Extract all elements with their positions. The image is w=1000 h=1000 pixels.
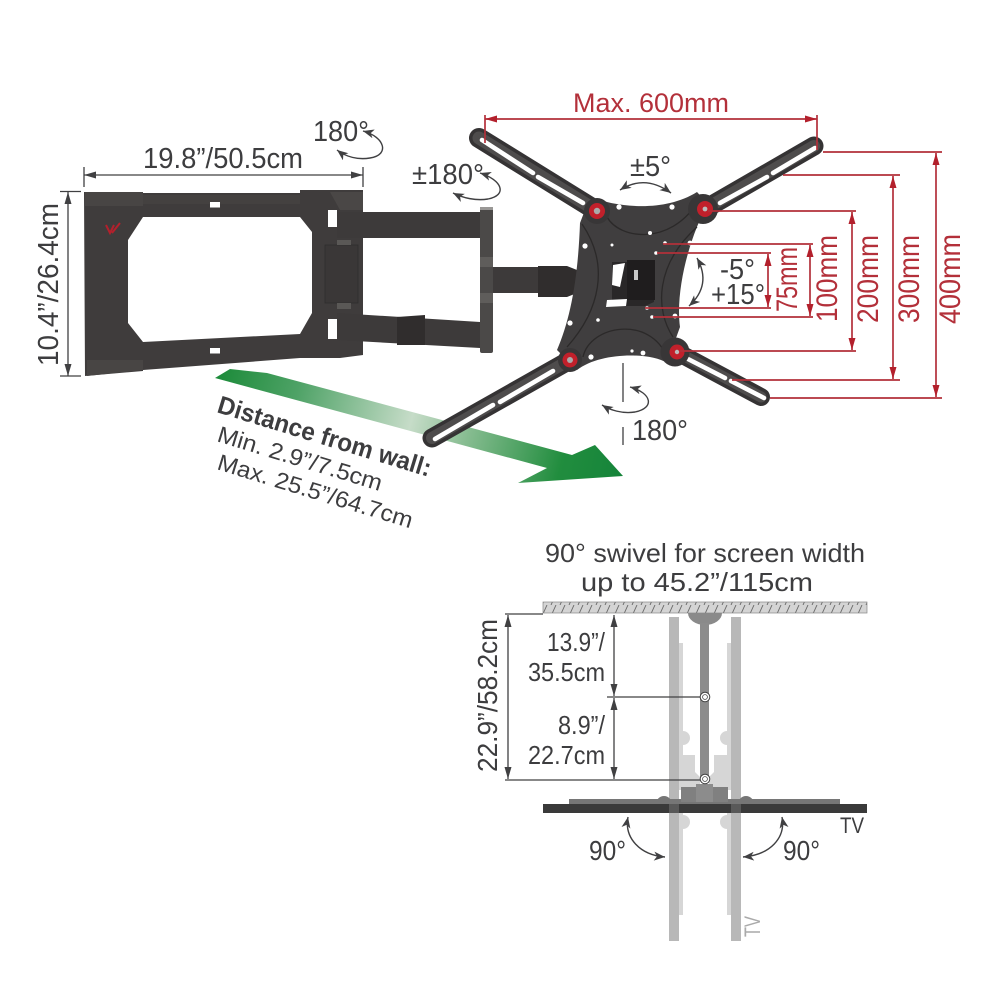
portrait rotation label 180 degrees: 180° <box>632 415 688 447</box>
dimension: first arm 13.9in: 35.5cm <box>528 657 605 687</box>
tilt label -5 +15 degrees <box>689 254 765 311</box>
dimension: second arm 8.9in: 8.9”/ <box>558 710 606 740</box>
bracket arms with slots <box>432 138 815 439</box>
dimension: first arm 13.9in <box>528 615 700 697</box>
dimension: 100mm: 100mm <box>811 235 844 322</box>
VESA plate <box>557 192 708 370</box>
TV labels: TV <box>840 813 864 838</box>
dimension: plate height 10.4in <box>33 192 81 376</box>
dimension: 300mm: 300mm <box>893 235 926 323</box>
tilt label -5 +15 degrees: +15° <box>711 279 765 311</box>
tilt rotation label 5 degrees <box>620 151 671 193</box>
TV landscape position <box>543 796 867 813</box>
dimension: 400mm: 400mm <box>934 234 967 324</box>
mounting holes <box>567 204 692 360</box>
TV swivelled positions <box>669 617 741 941</box>
mount arms <box>681 613 728 802</box>
distance from wall text: Distance from wall: <box>214 391 435 483</box>
rotation label: wall 180 degrees: 180° <box>313 116 369 148</box>
distance from wall text: Max. 25.5”/64.7cm <box>215 449 416 533</box>
swivel angle right 90 degrees <box>743 817 820 866</box>
distance from wall text <box>214 391 435 533</box>
dimension: 75mm: 75mm <box>771 247 804 312</box>
dimension: 75mm <box>645 247 804 312</box>
TV swivel side profiles <box>679 643 731 915</box>
tilt label -5 +15 degrees: -5° <box>720 254 755 286</box>
rotation label: wall 180 degrees <box>313 116 383 159</box>
dimension: total depth 22.9in: 22.9”/58.2cm <box>472 619 503 772</box>
brand logo <box>106 223 120 233</box>
rotation label: arm 180 degrees: ±180° <box>412 159 484 191</box>
tilt rotation label 5 degrees: ±5° <box>630 151 671 183</box>
swivel angle left 90 degrees <box>589 817 665 866</box>
swivel angle left 90 degrees: 90° <box>589 835 626 866</box>
dimension: plate height 10.4in: 10.4”/26.4cm <box>33 203 65 366</box>
rotation label: arm 180 degrees <box>412 159 500 200</box>
red adjustment knobs <box>558 194 718 372</box>
dimension: 200mm: 200mm <box>852 235 885 323</box>
dimension: max 600mm <box>485 88 817 150</box>
dimension: plate width 19.8in <box>84 143 363 187</box>
dimension: plate width 19.8in: 19.8”/50.5cm <box>143 143 303 175</box>
top-view diagram: wall, mount and TV: TV <box>740 916 765 937</box>
swivel angle right 90 degrees: 90° <box>783 835 820 866</box>
dimension: 200mm <box>680 211 885 351</box>
swivel heading <box>545 538 865 597</box>
portrait rotation label 180 degrees <box>602 363 688 447</box>
dimension: 400mm <box>770 152 967 398</box>
swivel heading: 90° swivel for screen width <box>545 538 865 568</box>
dimension: max 600mm: Max. 600mm <box>573 88 729 118</box>
wall plate <box>84 190 363 376</box>
dimension: second arm 8.9in <box>528 698 614 779</box>
top-view diagram: wall, mount and TV <box>543 602 867 941</box>
dimension: 300mm <box>732 175 926 380</box>
wall section <box>543 602 867 613</box>
swing arms <box>337 207 577 353</box>
centre window <box>612 262 654 306</box>
distance from wall text: Min. 2.9”/7.5cm <box>215 421 386 496</box>
dimension: second arm 8.9in: 22.7cm <box>528 740 605 770</box>
green distance arrow <box>215 369 623 483</box>
dimension: total depth 22.9in <box>472 614 700 780</box>
swivel heading: up to 45.2”/115cm <box>581 567 813 597</box>
dimension: 100mm <box>653 235 844 322</box>
dimension: first arm 13.9in: 13.9”/ <box>547 627 606 657</box>
